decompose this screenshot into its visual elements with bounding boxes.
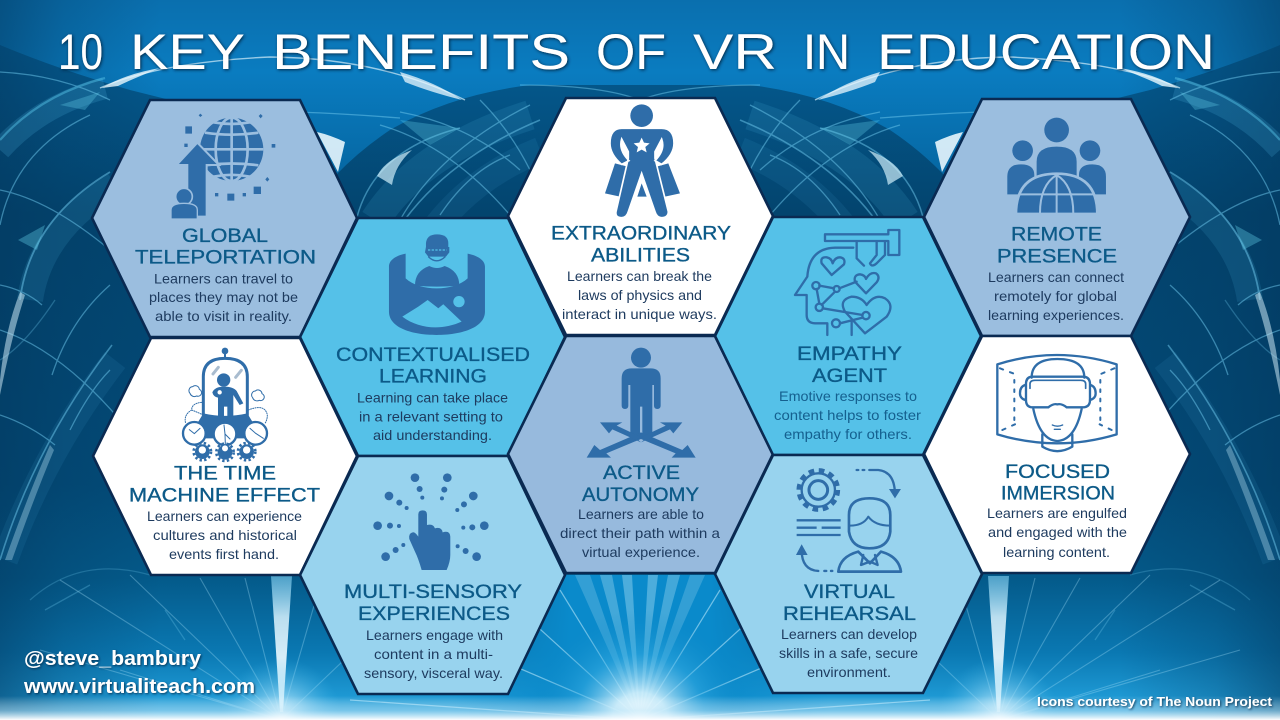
heading: EMPATHY [797,343,902,365]
title [58,24,1215,80]
panel: extraordinary abilities [508,98,773,335]
description: Learners can connect [988,270,1124,285]
description: in a relevant setting to [359,410,503,424]
title: KEY [130,24,245,80]
heading: MACHINE EFFECT [129,484,320,506]
heading [551,222,731,266]
description [364,628,503,681]
panel: the time machine effect [93,338,357,575]
heading [1001,461,1115,504]
title: OF [596,24,666,80]
panel: remote presence [924,99,1190,336]
description: Learners are engulfed [987,506,1127,521]
icon: VR headset face [997,355,1117,451]
description: Learning can take place [357,390,508,406]
icon: touch hand with dots [373,473,489,570]
description: virtual experience. [582,545,700,560]
description: learning experiences. [988,308,1124,323]
description [147,509,302,562]
description: remotely for global [994,289,1117,304]
panel: virtual rehearsal [715,455,982,693]
heading [129,462,320,506]
heading: MULTI-SENSORY [344,581,522,603]
description [779,627,918,680]
description: empathy for others. [784,427,912,442]
icon: superhero [605,104,680,218]
hexagon [715,455,982,693]
heading: FOCUSED [1005,461,1110,483]
title: VR [693,24,777,80]
icon: time machine [183,348,267,461]
heading [336,344,530,388]
credits: icon attribution: Icons courtesy of The Noun Project [1037,694,1273,709]
heading [344,581,522,625]
description: learning content. [1003,545,1110,560]
hexagon [508,98,773,335]
heading: LEARNING [379,366,487,388]
description: interact in unique ways. [562,307,717,322]
description: Learners are able to [578,507,704,522]
icon: head with hearts [795,230,899,335]
heading: TELEPORTATION [135,246,316,268]
hexagon [300,456,565,694]
description [149,272,298,324]
description: Learners can experience [147,509,302,524]
panel: multi-sensory experiences [300,456,565,694]
heading [997,224,1117,268]
title: EDUCATION [877,24,1215,80]
description: Learners can break the [567,269,712,284]
heading: ACTIVE [603,462,680,484]
hexagon [300,218,565,456]
heading: REMOTE [1011,224,1102,246]
description [357,390,508,443]
description: and engaged with the [988,525,1127,540]
description [987,506,1127,560]
panel: global teleportation [92,100,357,337]
description [988,270,1124,323]
description: cultures and historical [153,528,297,543]
description: Learners can travel to [154,272,293,286]
description: Emotive responses to [779,389,917,404]
title: IN [803,24,850,80]
description [774,389,922,442]
heading: AGENT [812,365,887,387]
heading [135,225,316,268]
heading: EXTRAORDINARY [551,222,731,244]
icon: globe with arrow and person [171,114,275,219]
heading [797,343,902,387]
title: BENEFITS [272,24,570,80]
panel: contextualised learning [300,218,565,456]
hexagon [924,99,1190,336]
hexagon [93,338,357,575]
hexagon [715,217,981,455]
icon: person at crossroads [587,348,696,458]
credits: author handle and website [23,648,255,698]
panel: focused immersion [924,336,1190,573]
heading: GLOBAL [182,225,268,247]
credits: author handle and website: www.virtualiteach.com [23,676,255,698]
heading [582,462,699,506]
heading [783,581,916,625]
description: able to visit in reality. [155,309,292,324]
icon: person in curved screen [389,234,485,335]
hexagon [92,100,357,337]
heading: VIRTUAL [804,581,895,603]
hexagon [924,336,1190,573]
description: sensory, visceral way. [364,666,503,681]
credits: author handle and website: @steve_bambury [24,648,202,670]
description: content helps to foster [774,408,922,423]
description: Learners can develop [781,627,917,642]
panel: active autonomy [508,336,773,573]
icon: people over globe [1007,118,1106,214]
hexagon [508,336,773,573]
description: aid understanding. [373,428,492,443]
description: skills in a safe, secure [779,646,918,661]
icon: person with gear and arrows [796,470,901,572]
heading: PRESENCE [997,246,1117,268]
description: environment. [807,665,891,680]
heading: IMMERSION [1001,482,1115,504]
description: Learners engage with [366,628,503,643]
description: direct their path within a [560,526,720,541]
title: 10 [58,24,103,80]
heading: AUTONOMY [582,484,699,506]
heading: CONTEXTUALISED [336,344,530,366]
description: places they may not be [149,290,298,305]
heading: REHEARSAL [783,603,916,625]
panel: empathy agent [715,217,981,455]
description: content in a multi- [374,647,493,662]
description: laws of physics and [578,288,702,303]
description [562,269,717,322]
description [560,507,720,560]
heading: ABILITIES [591,244,690,266]
heading: THE TIME [174,462,276,484]
description: events first hand. [169,547,279,562]
heading: EXPERIENCES [358,603,510,625]
